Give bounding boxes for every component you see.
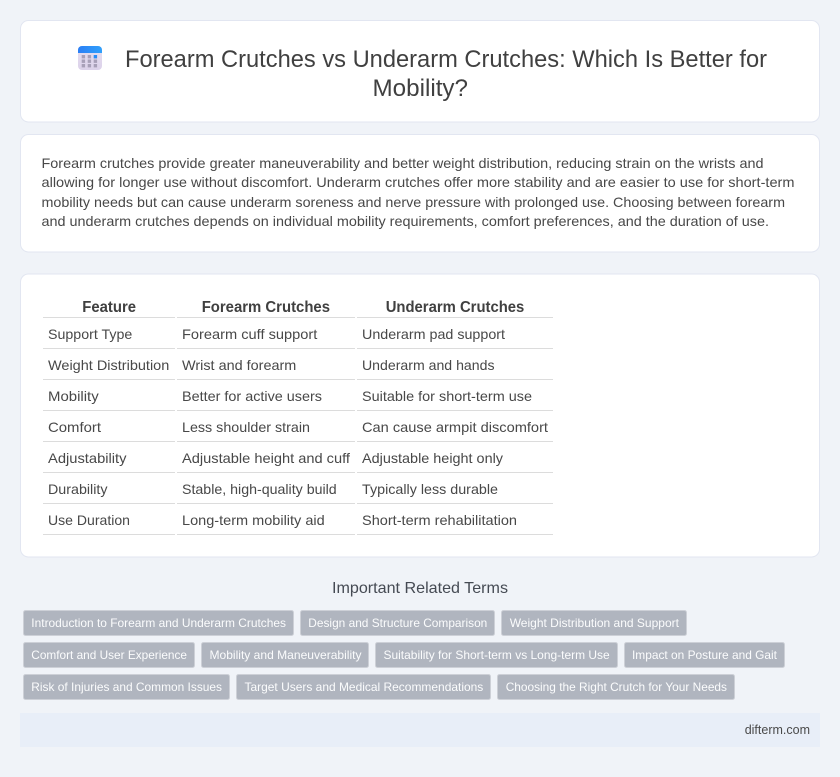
- table row: Mobility: Suitable for short-term use: [362, 388, 532, 404]
- tag: choosing: [498, 674, 734, 700]
- tag: choosing: Choosing the Right Crutch for Your Needs: [506, 680, 727, 694]
- tag: introduction: Introduction to Forearm and Underarm Crutches: [31, 616, 286, 630]
- table row: Mobility: [43, 388, 553, 411]
- table row: Adjustability: [43, 450, 553, 473]
- table row: Weight Distribution: Wrist and forearm: [182, 357, 296, 373]
- table row: Mobility: Better for active users: [182, 388, 322, 404]
- footer source: difterm.com: [745, 722, 810, 737]
- tag: design: Design and Structure Comparison: [308, 616, 487, 630]
- tag: introduction: [24, 610, 294, 636]
- icon: calendar grid: [78, 46, 102, 70]
- text block: summary: Forearm crutches provide greater maneuverability and better weight distribution, reducing strain on the wrists and: [42, 155, 764, 171]
- table header: Feature: [82, 299, 136, 316]
- text block: summary: mobility needs but can cause underarm soreness and nerve pressure with prolonged use. Choosing between forearm: [42, 194, 785, 210]
- table header: Forearm Crutches: [202, 299, 330, 316]
- panel: summary paragraph: [20, 134, 820, 252]
- table row: Use Duration: [43, 512, 553, 535]
- tag: suitability: [376, 642, 618, 668]
- title: [125, 46, 767, 102]
- table row: Support Type: [43, 326, 553, 349]
- table row: Durability: Typically less durable: [362, 481, 498, 497]
- table row: Comfort: Comfort: [48, 419, 101, 435]
- text block: summary: [42, 155, 794, 229]
- table row: Mobility: Mobility: [48, 388, 99, 404]
- table row: Weight Distribution: [43, 357, 553, 380]
- panel: title card: [20, 20, 820, 122]
- table row: Durability: [43, 481, 553, 504]
- text block: summary: and underarm crutches depends on individual mobility requirements, comfort preferences, and the duration of use.: [42, 213, 769, 229]
- title: Mobility?: [372, 75, 468, 102]
- tag: target users: Target Users and Medical Recommendations: [244, 680, 483, 694]
- tag: posture: Impact on Posture and Gait: [632, 648, 778, 662]
- text block: summary: allowing for longer use without discomfort. Underarm crutches offer more stability and are easier to use for short-term: [42, 174, 794, 190]
- tag: design: [300, 610, 494, 636]
- table row: Weight Distribution: Weight Distribution: [48, 357, 169, 373]
- tag: mobility: [202, 642, 368, 668]
- tag: comfort: Comfort and User Experience: [31, 648, 187, 662]
- table row: Comfort: Can cause armpit discomfort: [362, 419, 548, 435]
- table row: Support Type: Underarm pad support: [362, 326, 505, 342]
- table row: Adjustability: Adjustability: [48, 450, 126, 466]
- table row: Durability: Durability: [48, 481, 108, 497]
- table row: Weight Distribution: Underarm and hands: [362, 357, 494, 373]
- table header: Underarm Crutches: [386, 299, 524, 316]
- table row: Durability: Stable, high-quality build: [182, 481, 337, 497]
- table row: Support Type: Support Type: [48, 326, 133, 342]
- tag: risk: Risk of Injuries and Common Issues: [31, 680, 222, 694]
- footer bar: [20, 713, 820, 747]
- tag: posture: [624, 642, 784, 668]
- tag: target users: [236, 674, 490, 700]
- table header: [43, 299, 553, 318]
- panel: related term tags: [24, 610, 784, 700]
- tag: mobility: Mobility and Maneuverability: [210, 648, 362, 662]
- table row: Adjustability: Adjustable height and cuff: [182, 450, 350, 466]
- heading: related terms: Important Related Terms: [332, 580, 508, 597]
- table row: Support Type: Forearm cuff support: [182, 326, 317, 342]
- tag: suitability: Suitability for Short-term vs Long-term Use: [384, 648, 610, 662]
- title: Forearm Crutches vs Underarm Crutches: Which Is Better for: [125, 46, 767, 73]
- tag: weight: Weight Distribution and Support: [510, 616, 680, 630]
- tag: weight: [502, 610, 686, 636]
- table row: Comfort: Less shoulder strain: [182, 419, 310, 435]
- tag: risk: [24, 674, 230, 700]
- panel: comparison table: [20, 274, 820, 557]
- table row: Comfort: [43, 419, 553, 442]
- table row: Use Duration: Use Duration: [48, 512, 130, 528]
- table row: Use Duration: Long-term mobility aid: [182, 512, 325, 528]
- table row: Use Duration: Short-term rehabilitation: [362, 512, 517, 528]
- table row: Adjustability: Adjustable height only: [362, 450, 503, 466]
- tag: comfort: [24, 642, 194, 668]
